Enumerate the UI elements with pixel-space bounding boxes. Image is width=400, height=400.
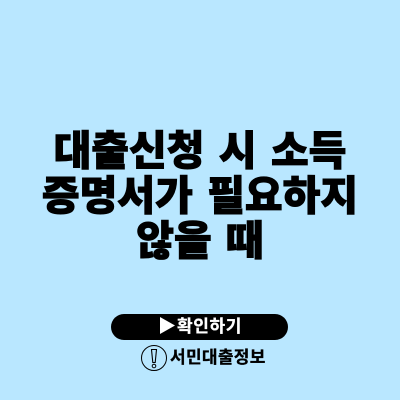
title: 증명서가 필요하지 [42,173,358,219]
title [42,128,358,264]
button: confirm [111,314,288,340]
title: 대출신청 시 소득 [54,128,346,174]
button label: 확인하기 [177,317,242,336]
brand name: 서민대출정보 [170,348,266,367]
brand: logo and name [141,345,266,371]
title: 않을 때 [136,218,264,264]
icon: play triangle [160,317,175,334]
icon: exclamation circle [141,345,167,371]
